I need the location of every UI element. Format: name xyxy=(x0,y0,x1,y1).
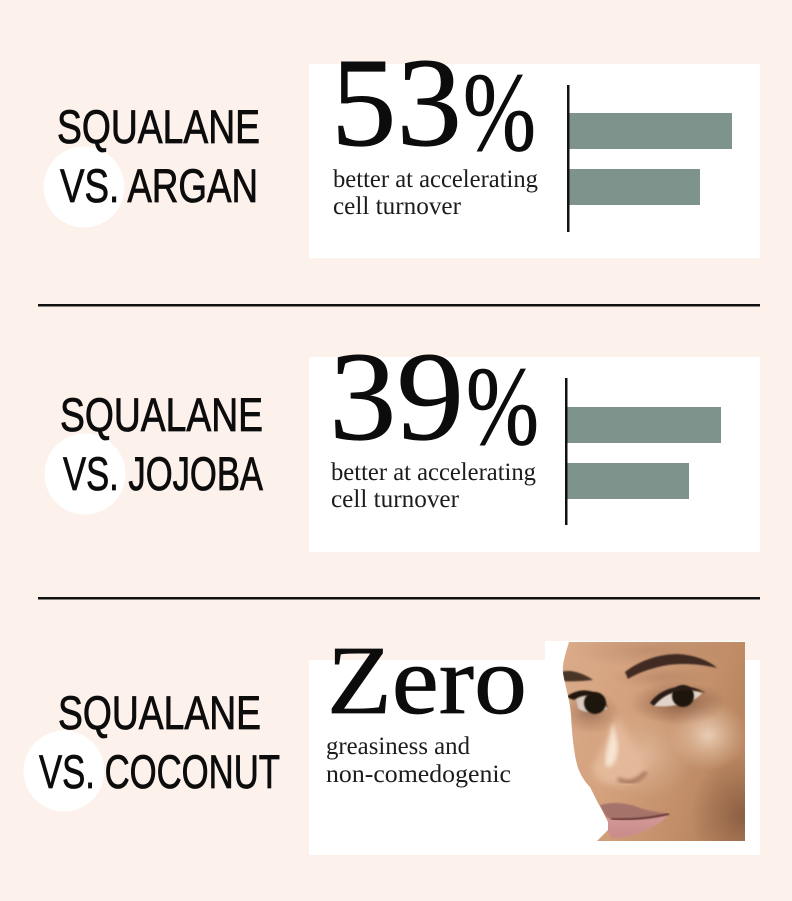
heading: squalane vs jojoba xyxy=(44,388,263,514)
description: non-comedogenic xyxy=(326,761,511,788)
heading: squalane vs coconut: SQUALANE xyxy=(58,686,261,739)
divider xyxy=(38,597,760,600)
card: argan stat xyxy=(309,33,760,258)
description xyxy=(333,166,538,220)
brows xyxy=(625,654,717,679)
heading: squalane vs jojoba: SQUALANE xyxy=(60,388,263,441)
eyes xyxy=(653,690,702,706)
panel: squalane vs argan xyxy=(44,33,760,258)
description: cell turnover xyxy=(333,193,462,220)
heading: squalane vs coconut: VS. COCONUT xyxy=(39,745,280,798)
heading: squalane vs jojoba: VS. JOJOBA xyxy=(63,447,263,500)
stat 39%: % xyxy=(466,345,539,469)
stat 39% xyxy=(329,327,539,469)
description: better at accelerating xyxy=(333,166,538,193)
divider xyxy=(38,304,760,306)
lips xyxy=(607,814,669,838)
nose xyxy=(592,715,646,784)
description xyxy=(326,733,511,788)
white circle behind vs xyxy=(44,434,126,514)
description: cell turnover xyxy=(331,486,460,513)
heading: squalane vs argan: VS. ARGAN xyxy=(60,159,258,212)
heading: squalane vs argan: SQUALANE xyxy=(57,100,260,153)
white circle behind vs xyxy=(44,146,124,228)
stat 53%: % xyxy=(463,51,536,175)
stat 53%: 53 xyxy=(331,33,462,173)
bar chart xyxy=(567,85,732,232)
heading: squalane vs coconut xyxy=(24,686,280,812)
white circle behind vs xyxy=(24,730,104,812)
photo: woman's face xyxy=(562,642,745,841)
description: greasiness and xyxy=(326,733,470,760)
stat 39%: 39 xyxy=(329,327,464,467)
description: better at accelerating xyxy=(331,459,536,486)
panel: squalane vs jojoba xyxy=(44,327,760,552)
card: coconut stat xyxy=(309,641,760,855)
stat zero: Zero xyxy=(327,627,527,734)
panel: squalane vs coconut xyxy=(24,641,760,855)
stat 53% xyxy=(331,33,536,175)
bar chart xyxy=(565,378,721,525)
heading: squalane vs argan xyxy=(44,100,260,228)
description xyxy=(331,459,536,513)
card: jojoba stat xyxy=(309,327,760,552)
